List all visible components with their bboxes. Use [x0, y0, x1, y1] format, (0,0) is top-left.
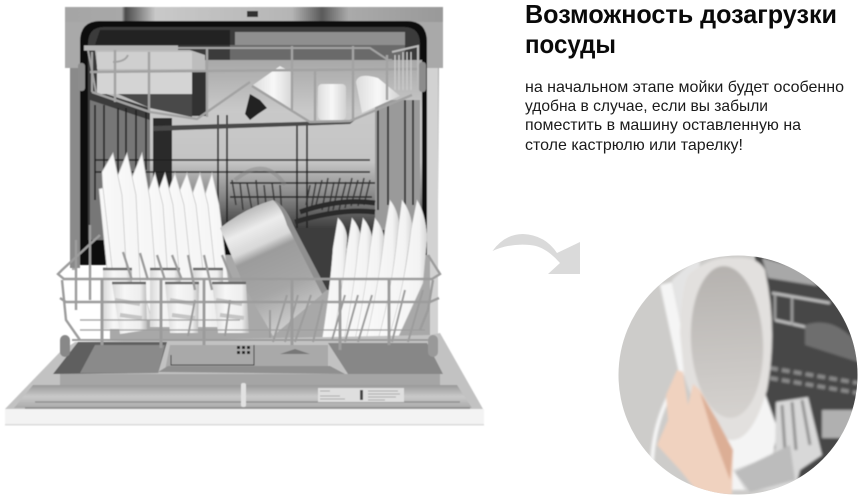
body text: поместить в машину оставленную на	[525, 117, 801, 134]
shelf shadow	[153, 120, 355, 131]
front edge	[5, 409, 484, 425]
rating label	[318, 388, 404, 402]
door interior	[5, 333, 484, 426]
arrow	[492, 234, 580, 274]
body text	[525, 79, 844, 154]
light door edge	[660, 282, 684, 374]
white wall behind glass	[727, 394, 778, 491]
door trim	[14, 385, 472, 408]
basket wires	[84, 46, 418, 122]
body text: удобна в случае, если вы забыли	[525, 98, 768, 115]
body text: столе кастрюлю или тарелку!	[525, 137, 743, 154]
lower basket	[58, 225, 440, 357]
floor panels	[53, 342, 167, 374]
rack behind dishes	[110, 255, 430, 340]
cups	[245, 66, 400, 120]
heading	[525, 0, 837, 59]
hand	[657, 370, 733, 495]
cutlery tray	[95, 50, 207, 118]
circular photo: loading a plate	[618, 255, 860, 495]
dispenser	[158, 345, 345, 374]
heading: посуды	[525, 29, 616, 59]
glass	[733, 397, 822, 490]
wash cavity	[80, 21, 427, 265]
dishwasher photo	[5, 7, 484, 426]
cake pan	[220, 200, 327, 336]
plate	[680, 258, 772, 440]
dark rack behind the pan	[295, 228, 345, 290]
glasses	[103, 269, 249, 334]
left plates	[99, 153, 240, 320]
body text: на начальном этапе мойки будет особенно	[525, 79, 844, 96]
top steel frame	[65, 7, 443, 338]
right plates	[322, 200, 427, 340]
dark interior	[755, 255, 860, 495]
rear wires and lower shadows	[95, 100, 413, 228]
upper basket	[78, 46, 426, 131]
